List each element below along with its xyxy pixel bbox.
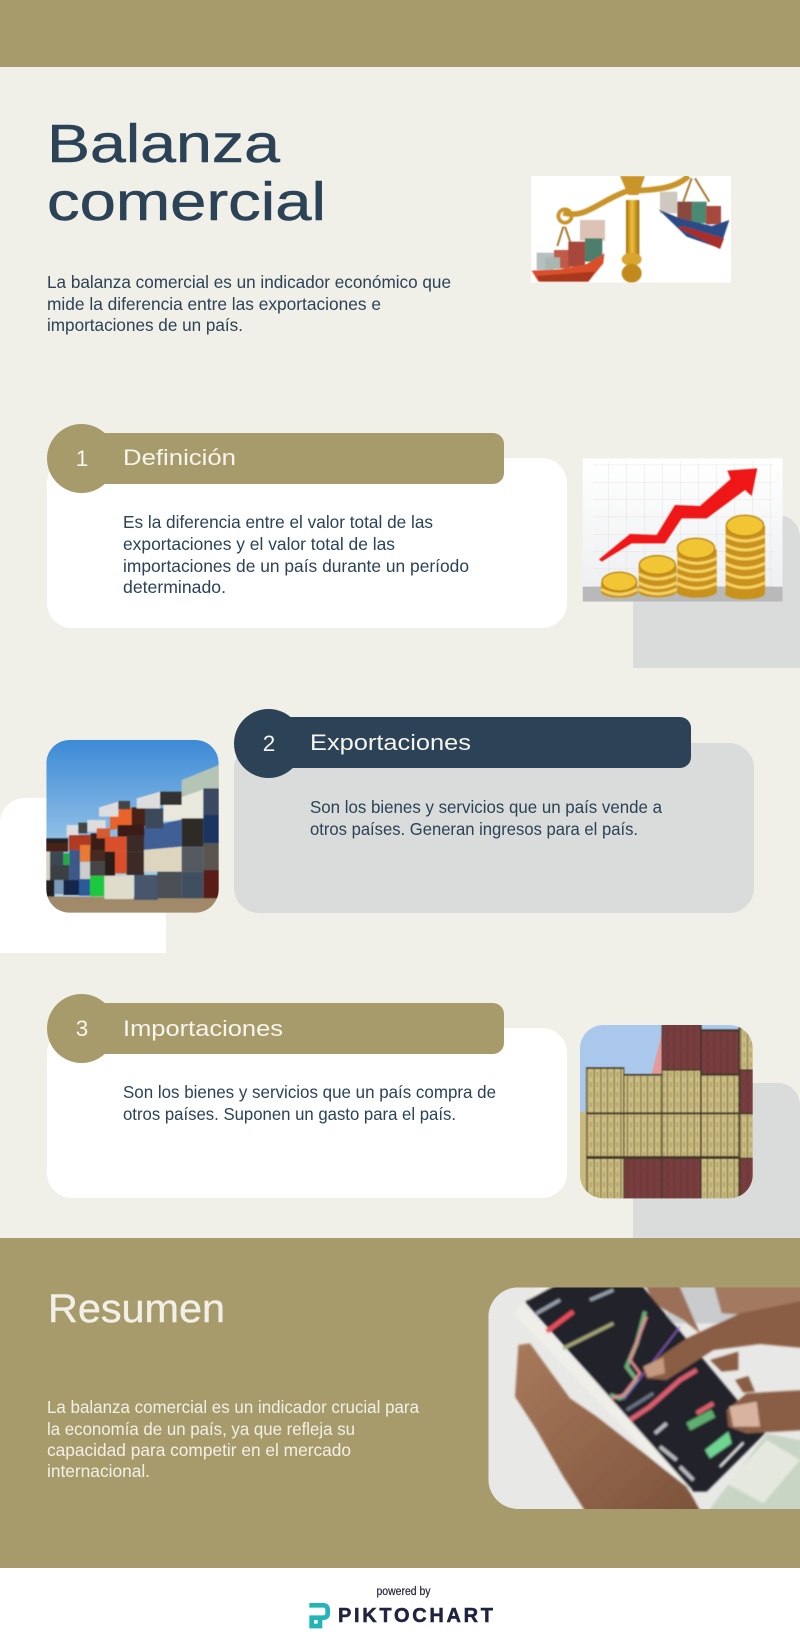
footer background: [0, 1568, 800, 1648]
body text: determinado.: [123, 577, 226, 597]
number badge: [47, 994, 116, 1063]
body text: Son los bienes y servicios que un país compra de: [123, 1082, 496, 1102]
header bar: [75, 433, 504, 484]
summary text: La balanza comercial es un indicador crucial para: [47, 1397, 419, 1417]
panel: resumen: [0, 1238, 800, 1568]
number: 2: [263, 731, 275, 756]
wordmark: PIKTOCHART: [338, 1605, 493, 1627]
intro text: importaciones de un país.: [47, 315, 243, 335]
title: [47, 114, 326, 232]
summary text: internacional.: [47, 1461, 150, 1481]
top band: [0, 0, 800, 67]
footer: [0, 1568, 800, 1648]
body text: [123, 1082, 496, 1124]
powered by label: powered by: [376, 1586, 431, 1598]
image: stacked Maersk containers under blue sky: [43, 740, 223, 917]
panel: definición: [47, 424, 567, 628]
summary text: capacidad para competir en el mercado: [47, 1440, 351, 1460]
icon: piktochart logo: [309, 1605, 328, 1626]
body text: [310, 797, 662, 839]
body text: otros países. Suponen un gasto para el país.: [123, 1104, 456, 1124]
card: [234, 743, 754, 913]
body text: Son los bienes y servicios que un país vende a: [310, 797, 662, 817]
number: 3: [76, 1016, 88, 1041]
body text: importaciones de un país durante un período: [123, 556, 469, 576]
body text: [123, 512, 469, 597]
title: Balanza: [47, 114, 281, 174]
number badge: [234, 709, 303, 778]
body text: otros países. Generan ingresos para el país.: [310, 819, 638, 839]
intro text: mide la diferencia entre las exportaciones e: [47, 294, 381, 314]
heading: Importaciones: [123, 1016, 283, 1041]
summary band: [0, 1238, 800, 1568]
number badge: [47, 424, 116, 493]
card: [47, 458, 567, 628]
image: red arrow over coin stacks: [583, 458, 783, 602]
header bar: [262, 717, 691, 768]
decoration: gray block behind section 1 image: [633, 515, 800, 668]
heading: Exportaciones: [310, 730, 471, 755]
panel: exportaciones: [234, 709, 754, 913]
summary text: [47, 1397, 419, 1481]
panel: importaciones: [47, 994, 567, 1198]
card: [47, 1028, 567, 1198]
title: comercial: [47, 172, 326, 232]
image: scale balancing two cargo ships: [531, 176, 731, 283]
heading: Resumen: [48, 1287, 225, 1331]
header bar: [75, 1003, 504, 1054]
summary text: la economía de un país, ya que refleja su: [47, 1419, 355, 1439]
decoration: white block behind section 2 image: [0, 798, 166, 953]
image: wall of yellow and maroon containers: [573, 1023, 755, 1205]
heading: Definición: [123, 445, 236, 470]
number: 1: [76, 446, 88, 471]
image: hands using phone with trading chart: [488, 1283, 800, 1513]
intro text: La balanza comercial es un indicador económico que: [47, 272, 451, 292]
intro text: [47, 272, 451, 335]
decoration: gray block behind section 3 image: [633, 1083, 800, 1238]
body text: exportaciones y el valor total de las: [123, 534, 395, 554]
body text: Es la diferencia entre el valor total de las: [123, 512, 433, 532]
